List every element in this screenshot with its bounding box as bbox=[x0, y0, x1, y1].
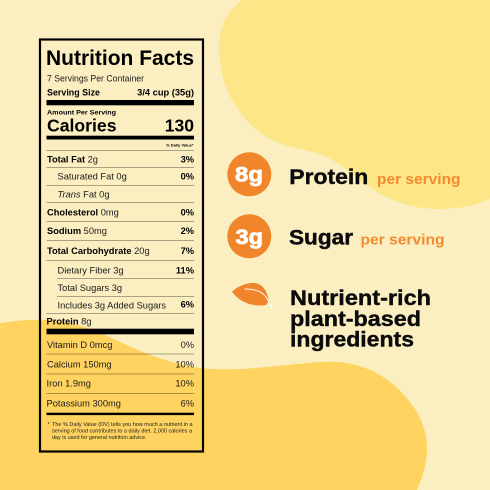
icon: leaf bbox=[232, 283, 272, 308]
row: protein: Protein 8g bbox=[46, 317, 91, 327]
footnote: serving of food contributes to a daily diet. 2,000 calories a bbox=[52, 428, 193, 434]
ingredients text: ingredients bbox=[290, 328, 414, 352]
protein label: Protein bbox=[289, 165, 368, 189]
icon: 3g badge: 3g bbox=[236, 225, 263, 249]
daily value header: % Daily Value* bbox=[166, 142, 194, 147]
row: saturated fat: 0% bbox=[181, 172, 195, 182]
calories: Calories bbox=[47, 115, 117, 135]
sugar label: Sugar bbox=[289, 225, 354, 249]
row: vitamin d: Vitamin D 0mcg bbox=[47, 340, 112, 350]
servings per container: 7 Servings Per Container bbox=[47, 74, 144, 84]
thick divider calories bbox=[46, 136, 194, 140]
ingredients text bbox=[290, 286, 431, 352]
row: total fat: 3% bbox=[181, 155, 195, 165]
amount per serving: Amount Per Serving bbox=[47, 110, 116, 117]
row: calcium bbox=[47, 360, 194, 370]
thick divider protein bbox=[46, 329, 194, 334]
serving size bbox=[47, 88, 194, 98]
row: total carbohydrate bbox=[47, 246, 195, 256]
row: saturated fat bbox=[58, 172, 195, 182]
heading: Nutrition Facts: Nutrition Facts bbox=[46, 47, 194, 70]
row: vitamin d: 0% bbox=[181, 340, 194, 350]
callout: protein bbox=[227, 152, 460, 196]
serving size: Serving Size bbox=[47, 88, 100, 98]
row: vitamin d bbox=[47, 340, 194, 350]
row: dietary fiber: 11% bbox=[176, 266, 195, 276]
row: total fat bbox=[47, 155, 195, 165]
sugar per serving: per serving bbox=[360, 231, 444, 248]
row: sodium bbox=[47, 226, 195, 236]
row: iron: Iron 1.9mg bbox=[46, 379, 91, 389]
callout: plant-based ingredients bbox=[232, 283, 431, 352]
row: cholesterol: 0% bbox=[181, 208, 195, 218]
calories: 130 bbox=[165, 115, 194, 135]
row: calcium: 10% bbox=[175, 360, 194, 370]
background blob: top right bbox=[219, 0, 490, 209]
ingredients text: plant-based bbox=[290, 307, 421, 331]
row: potassium: 6% bbox=[181, 399, 194, 409]
row: total carbohydrate: Total Carbohydrate 20g bbox=[47, 246, 150, 256]
row: dietary fiber: Dietary Fiber 3g bbox=[58, 266, 124, 276]
footnote: day is used for general nutrition advice. bbox=[52, 435, 147, 441]
row: added sugars: 6% bbox=[181, 299, 195, 309]
row: potassium: Potassium 300mg bbox=[46, 399, 121, 409]
row: added sugars: Includes 3g Added Sugars bbox=[58, 301, 166, 311]
thick divider bottom bbox=[46, 413, 194, 415]
row: trans fat: Trans Fat 0g bbox=[58, 190, 110, 200]
row: cholesterol bbox=[47, 208, 195, 218]
row: sodium: 2% bbox=[181, 226, 195, 236]
icon: 8g badge bbox=[227, 152, 271, 196]
row: calcium: Calcium 150mg bbox=[47, 360, 112, 370]
label border bbox=[40, 40, 203, 452]
thick divider top bbox=[46, 100, 194, 105]
icon: 8g badge: 8g bbox=[235, 163, 263, 187]
callout: sugar bbox=[227, 214, 444, 258]
footnote: The % Daily Value (DV) tells you how much a nutrient in a bbox=[52, 422, 193, 428]
background blob: bottom left bbox=[0, 320, 427, 490]
panel: nutrition facts label bbox=[40, 40, 203, 452]
row: saturated fat: Saturated Fat 0g bbox=[58, 172, 127, 182]
footnote bbox=[48, 422, 193, 441]
calories bbox=[47, 115, 194, 135]
serving size: 3/4 cup (35g) bbox=[137, 88, 194, 98]
row: cholesterol: Cholesterol 0mg bbox=[47, 208, 119, 218]
row: added sugars bbox=[58, 299, 195, 311]
row: iron bbox=[46, 379, 194, 389]
footnote: * bbox=[48, 422, 50, 428]
row: dietary fiber bbox=[58, 266, 195, 276]
row: sodium: Sodium 50mg bbox=[47, 226, 107, 236]
row: potassium bbox=[46, 399, 194, 409]
ingredients text: Nutrient-rich bbox=[290, 286, 431, 310]
row: total sugars: Total Sugars 3g bbox=[58, 283, 122, 293]
row: total carbohydrate: 7% bbox=[181, 246, 195, 256]
icon: 3g badge bbox=[227, 214, 271, 258]
row: total fat: Total Fat 2g bbox=[47, 155, 98, 165]
row: iron: 10% bbox=[175, 379, 194, 389]
protein per serving: per serving bbox=[377, 171, 460, 188]
